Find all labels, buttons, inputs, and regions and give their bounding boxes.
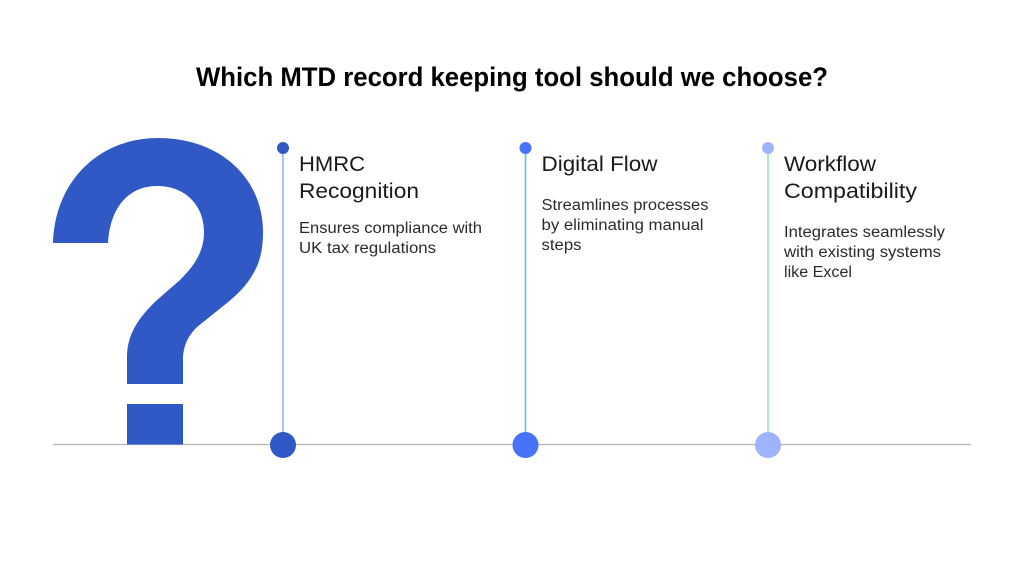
stem 1 <box>282 148 284 445</box>
body text 2: steps <box>542 237 582 254</box>
bottom marker 2 <box>512 432 538 458</box>
body text 1: UK tax regulations <box>299 240 436 257</box>
stem 2 <box>524 148 526 445</box>
body text 2: by eliminating manual <box>542 217 704 234</box>
icon: question mark <box>53 138 263 444</box>
panel: Digital Flow <box>512 142 709 458</box>
body text 3: with existing systems <box>783 244 941 261</box>
body text 1: Ensures compliance with <box>299 220 482 237</box>
body text 3: Integrates seamlessly <box>784 224 945 241</box>
heading 2: Digital Flow <box>542 152 658 176</box>
stem 3 <box>767 148 769 445</box>
heading 3: Compatibility <box>784 179 917 203</box>
panel: HMRC Recognition <box>270 142 482 458</box>
top marker 1 <box>277 142 289 154</box>
baseline axis <box>53 444 971 446</box>
panel: Workflow Compatibility <box>755 142 945 458</box>
body text 2: Streamlines processes <box>542 197 709 214</box>
body text 3: like Excel <box>784 264 852 281</box>
bottom marker 1 <box>270 432 296 458</box>
bottom marker 3 <box>755 432 781 458</box>
heading 3: Workflow <box>784 152 876 176</box>
heading 1: Recognition <box>299 179 419 203</box>
title: Which MTD record keeping tool should we choose? <box>196 62 828 92</box>
top marker 3 <box>762 142 774 154</box>
top marker 2 <box>520 142 532 154</box>
heading 1: HMRC <box>299 152 365 176</box>
